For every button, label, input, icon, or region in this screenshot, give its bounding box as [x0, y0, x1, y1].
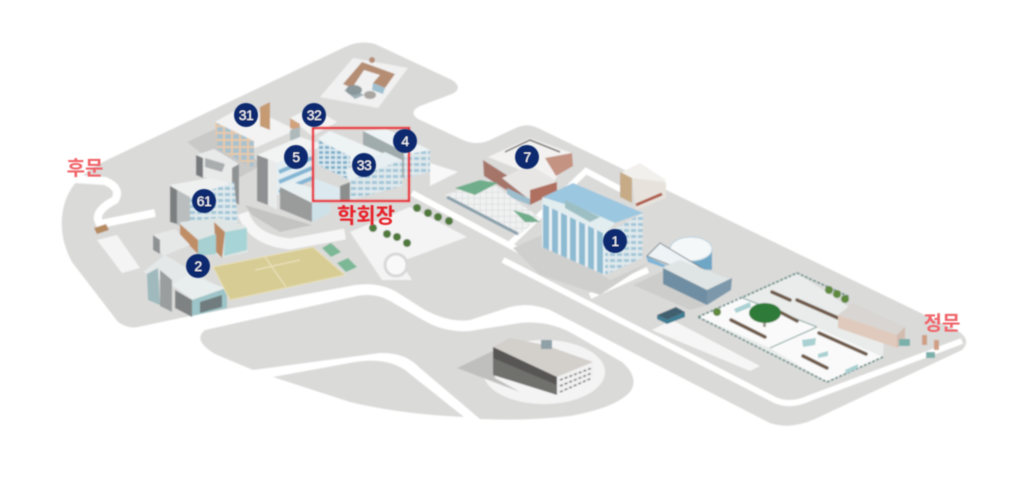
ground: bottom wedge — [273, 361, 464, 417]
label: rear gate: 후문 — [67, 157, 103, 180]
marker 2 — [186, 254, 210, 278]
road around cluster — [243, 213, 345, 244]
marker 7: 7 — [523, 149, 531, 165]
building: rear annex — [196, 149, 239, 205]
marker 61 — [192, 189, 216, 213]
sports field — [213, 247, 345, 300]
marker 31 — [234, 103, 258, 127]
marker 4 — [393, 129, 417, 153]
marker 31: 31 — [239, 107, 254, 123]
building: bottom — [493, 338, 594, 395]
gate posts — [899, 335, 939, 358]
building 61 — [170, 178, 248, 258]
building: north courtyard — [320, 57, 408, 108]
library building — [663, 260, 732, 305]
building 32 — [290, 107, 337, 143]
white roads — [412, 171, 962, 403]
marker 2: 2 — [194, 258, 202, 274]
shadow pads — [187, 128, 262, 180]
sunken garden — [445, 180, 540, 236]
building 1 — [542, 183, 643, 275]
parking lot — [97, 235, 140, 273]
marker 4: 4 — [401, 133, 409, 149]
plaza — [350, 207, 467, 280]
label: student hall: 학회장 — [337, 205, 395, 228]
building 31 — [215, 102, 296, 168]
main gate compound — [698, 273, 884, 382]
marker 7 — [515, 145, 539, 169]
ground: lower oval — [200, 295, 634, 420]
building 2 — [143, 229, 227, 317]
building: bottom pad — [483, 340, 605, 404]
white road: rear gate — [60, 178, 155, 224]
tennis courts — [322, 243, 357, 272]
highlight box — [313, 128, 409, 201]
marker 5 — [284, 145, 308, 169]
tree: large — [749, 303, 781, 327]
building 4 — [363, 129, 430, 178]
wedge by main road — [652, 320, 760, 371]
building 5 — [257, 137, 330, 222]
building 7 — [483, 138, 573, 205]
marker 33: 33 — [357, 157, 372, 173]
building 33 — [313, 131, 402, 200]
marker 32 — [302, 103, 326, 127]
marker 1: 1 — [611, 233, 619, 249]
dome building — [646, 237, 712, 275]
small dark building — [657, 307, 685, 324]
small tan building — [620, 163, 666, 210]
marker 5: 5 — [292, 149, 300, 165]
marker 32: 32 — [307, 107, 322, 123]
car — [94, 224, 109, 234]
building: gate hall — [838, 303, 905, 348]
marker 61: 61 — [197, 193, 212, 209]
label: main gate: 정문 — [924, 312, 960, 335]
building shadow — [457, 350, 520, 392]
trees — [369, 204, 453, 247]
marker 33 — [352, 153, 376, 177]
ground: main campus — [62, 43, 966, 426]
marker 1 — [603, 229, 627, 253]
